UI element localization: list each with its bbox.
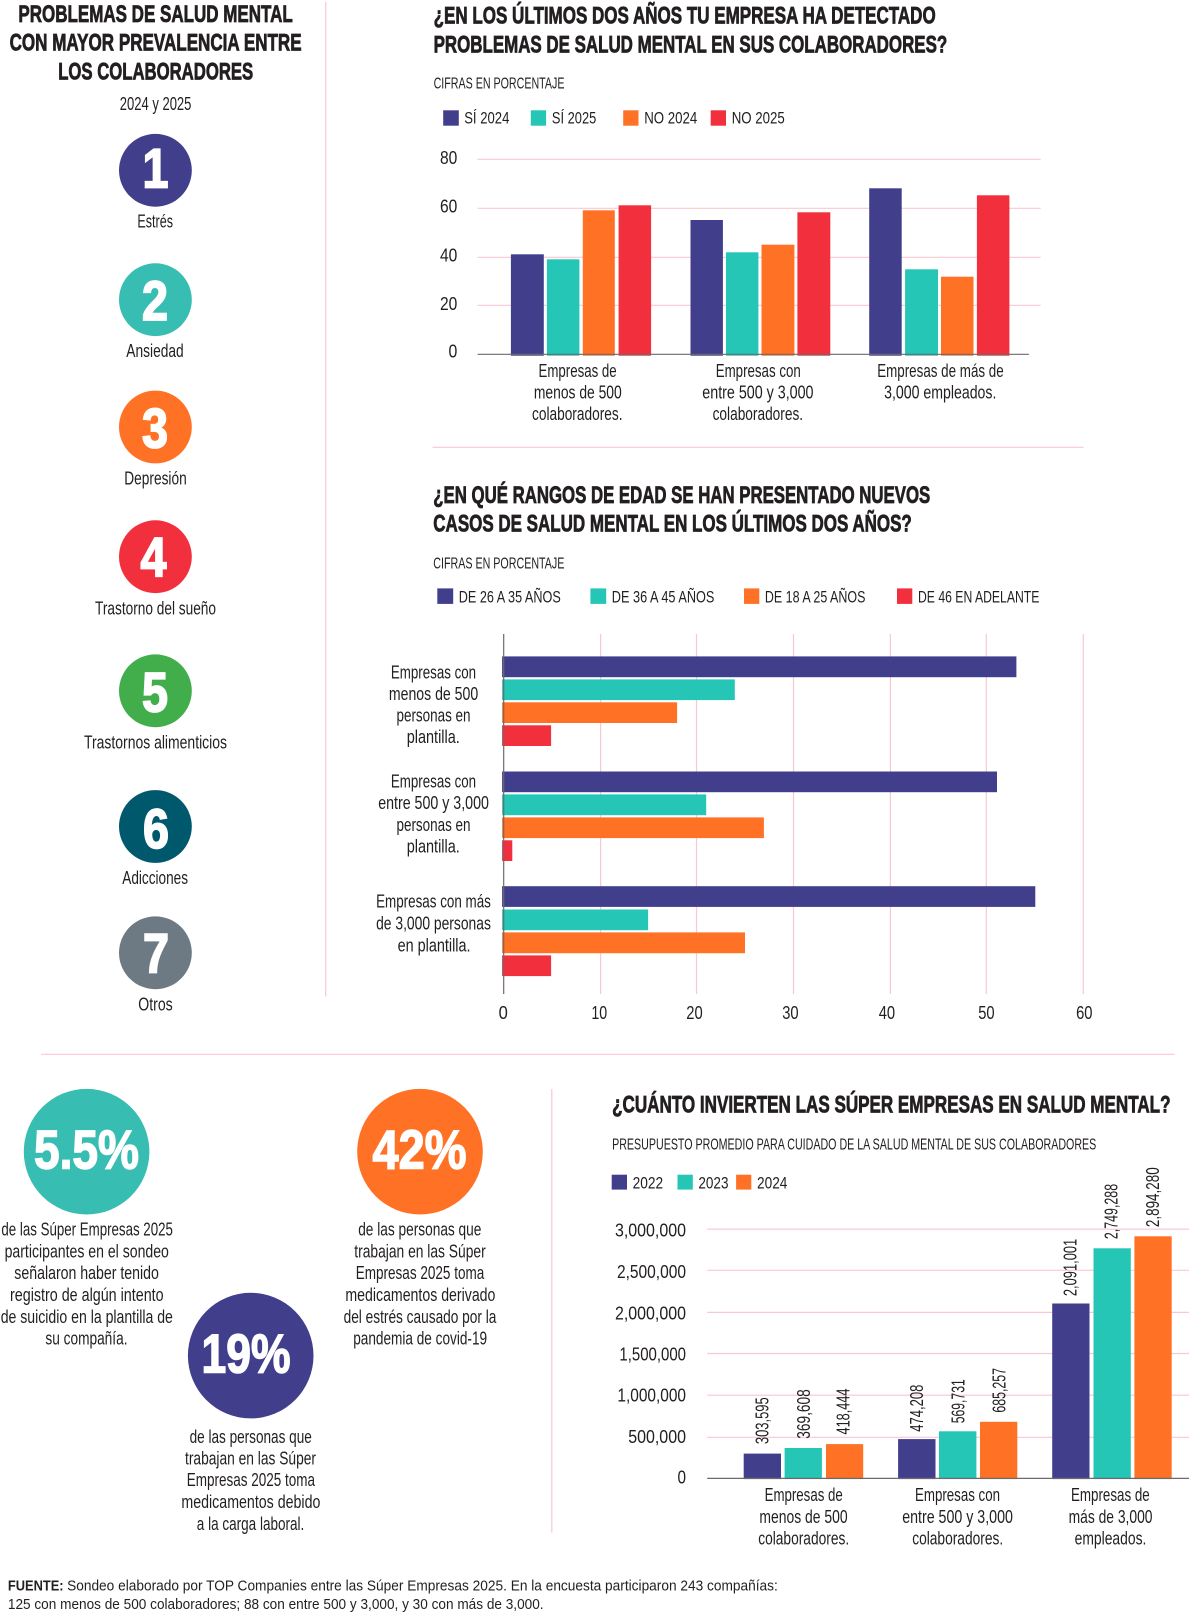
ranking item 1: estrés: 1: [142, 137, 168, 200]
heading: problemas detectados: [434, 1, 947, 59]
bars: entre 500 y 3,000: [690, 212, 830, 356]
category label: más de 3,000: 3,000 empleados.: [884, 382, 996, 402]
category label: menos de 500: Empresas de: [538, 361, 617, 381]
value labels: 569,731: [947, 1379, 968, 1423]
row label: menos de 500: Empresas con: [391, 663, 476, 683]
y axis labels: 1,500,000: [619, 1344, 686, 1365]
source note: 125 con menos de 500 colaboradores; 88 con entre 500 y 3,000, y 30 con más de 3,000.: [8, 1597, 544, 1613]
stat text: 42%: medicamentos derivado: [345, 1285, 495, 1305]
row label: entre 500 y 3,000: personas en: [396, 815, 470, 835]
heading: rangos de edad: CASOS DE SALUD MENTAL EN LOS ÚLTIMOS DOS AÑOS?: [433, 509, 912, 537]
stat text: 5.5%: registro de algún intento: [10, 1285, 164, 1305]
stat text: 42%: pandemia de covid-19: [353, 1329, 487, 1349]
bars: entre 500 y 3,000: [502, 772, 997, 861]
y axis labels: 20: [440, 294, 457, 314]
row label: entre 500 y 3,000: Empresas con: [391, 771, 476, 791]
value labels: [752, 1167, 1163, 1444]
legend: rangos de edad: DE 18 A 25 AÑOS: [765, 587, 865, 607]
bars: más de 3,000: [502, 886, 1035, 976]
stat text: 19%: [181, 1427, 320, 1534]
stat: 42% medicamentos por estrés: [344, 1089, 497, 1349]
y axis labels: 2,500,000: [617, 1261, 686, 1282]
subtitle: years: 2024 y 2025: [120, 94, 191, 114]
bars: menos de 500: [744, 1444, 863, 1479]
x axis labels: [499, 1003, 1093, 1023]
ranking item 4: trastorno del sueño: 4: [140, 526, 166, 589]
ranking item 2: ansiedad: [119, 263, 192, 361]
legend: rangos de edad: DE 26 A 35 AÑOS: [459, 587, 561, 607]
y axis labels: [615, 1219, 686, 1488]
value labels: 2,749,288: [1101, 1184, 1122, 1239]
value labels: 2,894,280: [1142, 1167, 1163, 1227]
ranking item 7: otros: 7: [143, 922, 169, 985]
category label: más de 3,000: [877, 361, 1004, 402]
category label: menos de 500: colaboradores.: [532, 404, 622, 424]
row label: más de 3,000: [376, 891, 491, 955]
row label: más de 3,000: Empresas con más: [376, 891, 491, 911]
value labels: 303,595: [752, 1397, 772, 1444]
category label: más de 3,000: Empresas de más de: [877, 361, 1004, 381]
ranking item 5: trastornos alimenticios: [84, 654, 227, 752]
stat text: 5.5%: de suicidio en la plantilla de: [1, 1307, 173, 1327]
bar chart: problemas detectados: [440, 148, 1041, 424]
horizontal bar chart: rangos de edad: [376, 634, 1093, 1023]
row label: menos de 500: personas en: [396, 706, 470, 726]
heading: problemas de salud mental: [10, 1, 302, 85]
row label: entre 500 y 3,000: entre 500 y 3,000: [378, 793, 489, 813]
category label: menos de 500: menos de 500: [534, 382, 622, 402]
category label: entre 500 y 3,000: [902, 1485, 1013, 1549]
legend: rangos de edad: DE 46 EN ADELANTE: [918, 589, 1039, 607]
legend: años: 2022: [633, 1175, 663, 1193]
legend: sí y no por año: SÍ 2025: [552, 109, 596, 128]
category label: entre 500 y 3,000: entre 500 y 3,000: [902, 1507, 1013, 1527]
heading: problemas de salud mental: LOS COLABORADORES: [58, 58, 253, 85]
y axis labels: 60: [440, 197, 457, 217]
y axis labels: 3,000,000: [615, 1219, 686, 1240]
category label: entre 500 y 3,000: Empresas con: [716, 361, 801, 381]
stat text: 5.5%: participantes en el sondeo: [5, 1241, 169, 1261]
stat: 19% medicamentos por carga laboral: 19%: [202, 1322, 290, 1384]
ranking item 7: otros: [119, 916, 192, 1014]
stat text: 42%: de las personas que: [358, 1219, 481, 1239]
panel: problemas detectados por tamaño de empresa: [434, 1, 1041, 424]
stat: 5.5% intento de suicidio: 5.5%: [34, 1118, 139, 1180]
heading: rangos de edad: ¿EN QUÉ RANGOS DE EDAD SE HAN PRESENTADO NUEVOS: [433, 481, 930, 509]
ranking item 7: otros: Otros: [138, 994, 173, 1014]
stat text: 42%: del estrés causado por la: [344, 1307, 497, 1327]
stat text: 19%: Empresas 2025 toma: [187, 1470, 316, 1490]
stat text: 5.5%: [1, 1219, 173, 1349]
source note: FUENTE:: [8, 1578, 64, 1594]
value labels: 474,208: [906, 1385, 927, 1432]
stat text: 42%: trabajan en las Súper: [354, 1241, 486, 1261]
y axis labels: 1,000,000: [617, 1385, 686, 1406]
category label: entre 500 y 3,000: colaboradores.: [912, 1529, 1003, 1549]
x axis labels: 30: [782, 1003, 799, 1023]
heading: problemas de salud mental: CON MAYOR PREVALENCIA ENTRE: [10, 29, 302, 56]
bars: menos de 500: [511, 205, 651, 356]
category label: más de 3,000: más de 3,000: [1069, 1507, 1152, 1527]
x axis labels: 40: [879, 1003, 895, 1023]
row label: menos de 500: [389, 663, 478, 747]
source note: [8, 1578, 778, 1613]
legend: sí y no por año: [443, 109, 785, 128]
bars: más de 3,000: [1052, 1236, 1172, 1479]
legend: años: [612, 1175, 787, 1193]
heading: problemas detectados: ¿EN LOS ÚLTIMOS DOS AÑOS TU EMPRESA HA DETECTADO: [434, 1, 936, 29]
ranking item 2: ansiedad: Ansiedad: [126, 341, 184, 361]
category label: más de 3,000: Empresas de: [1071, 1485, 1150, 1505]
y axis labels: 0: [678, 1466, 686, 1487]
stat text: 19%: a la carga laboral.: [197, 1514, 304, 1534]
x axis labels: 0: [499, 1003, 508, 1023]
value labels: 2,091,001: [1060, 1239, 1081, 1296]
y axis labels: 0: [448, 342, 457, 362]
ranking item 6: adicciones: Adicciones: [122, 868, 188, 888]
subtitle: cifras en porcentaje: CIFRAS EN PORCENTAJE: [434, 76, 564, 93]
y axis labels: [440, 148, 457, 362]
ranking item 2: ansiedad: 2: [142, 269, 168, 332]
ranking item 5: trastornos alimenticios: 5: [142, 660, 168, 723]
ranking item 4: trastorno del sueño: [95, 520, 216, 618]
ranking item 3: depresión: 3: [142, 396, 168, 459]
category label: más de 3,000: [1069, 1485, 1152, 1549]
panel: rangos de edad: [376, 481, 1093, 1023]
category label: menos de 500: Empresas de: [765, 1485, 843, 1505]
category label: entre 500 y 3,000: colaboradores.: [713, 404, 803, 424]
row label: menos de 500: plantilla.: [407, 727, 460, 747]
stat: 42% medicamentos por estrés: 42%: [372, 1118, 466, 1180]
ranking item 3: depresión: Depresión: [124, 469, 187, 489]
ranking item 6: adicciones: [119, 790, 192, 888]
bar chart: presupuesto: [615, 1167, 1189, 1549]
category label: más de 3,000: empleados.: [1075, 1529, 1146, 1549]
stat text: 5.5%: señalaron haber tenido: [14, 1263, 159, 1283]
bars: entre 500 y 3,000: [898, 1422, 1017, 1479]
category label: entre 500 y 3,000: Empresas con: [915, 1485, 1000, 1505]
stat text: 19%: medicamentos debido: [181, 1492, 320, 1512]
legend: rangos de edad: DE 36 A 45 AÑOS: [612, 587, 714, 607]
ranking item 3: depresión: [119, 391, 192, 489]
value labels: 418,444: [833, 1388, 854, 1434]
heading: problemas detectados: PROBLEMAS DE SALUD MENTAL EN SUS COLABORADORES?: [434, 32, 947, 59]
row label: más de 3,000: en plantilla.: [398, 935, 470, 955]
category label: menos de 500: menos de 500: [759, 1507, 848, 1527]
bars: más de 3,000: [869, 188, 1009, 356]
legend: sí y no por año: NO 2024: [644, 110, 697, 128]
y axis labels: 40: [440, 245, 457, 265]
ranking item 4: trastorno del sueño: Trastorno del sueño: [95, 598, 216, 618]
row label: menos de 500: menos de 500: [389, 684, 478, 704]
value labels: 685,257: [988, 1368, 1009, 1413]
legend: sí y no por año: SÍ 2024: [464, 109, 509, 128]
stat text: 42%: [344, 1219, 497, 1349]
stat text: 5.5%: su compañía.: [45, 1329, 128, 1349]
x axis labels: 20: [686, 1003, 703, 1023]
category label: menos de 500: colaboradores.: [758, 1529, 849, 1549]
stat text: 19%: de las personas que: [190, 1427, 312, 1447]
row label: entre 500 y 3,000: plantilla.: [407, 836, 460, 856]
x axis labels: 60: [1076, 1003, 1092, 1023]
source note: Sondeo elaborado por TOP Companies entre las Súper Empresas 2025. En la encuesta participaron 243 compañías:: [67, 1578, 778, 1594]
ranking item 5: trastornos alimenticios: Trastornos alimenticios: [84, 732, 227, 752]
stat text: 5.5%: de las Súper Empresas 2025: [1, 1219, 173, 1239]
row label: más de 3,000: de 3,000 personas: [376, 914, 491, 934]
legend: rangos de edad: [437, 587, 1039, 607]
ranking item 1: estrés: [119, 134, 192, 232]
ranking item 1: estrés: Estrés: [137, 212, 173, 232]
ranking item 6: adicciones: 6: [143, 797, 169, 860]
panel: problemas de salud mental: [10, 1, 302, 1014]
category label: entre 500 y 3,000: entre 500 y 3,000: [702, 382, 814, 402]
x axis labels: 10: [591, 1003, 607, 1023]
value labels: 369,608: [793, 1389, 814, 1439]
heading: problemas de salud mental: PROBLEMAS DE SALUD MENTAL: [18, 1, 293, 28]
category label: menos de 500: [758, 1485, 849, 1549]
legend: años: 2023: [698, 1175, 728, 1193]
x axis labels: 50: [978, 1003, 995, 1023]
bars: menos de 500: [502, 656, 1016, 746]
heading: rangos de edad: [433, 481, 930, 538]
stat: 19% medicamentos por carga laboral: [181, 1293, 320, 1534]
legend: sí y no por año: NO 2025: [732, 110, 785, 128]
row label: entre 500 y 3,000: [378, 772, 489, 856]
subtitle: cifras en porcentaje: CIFRAS EN PORCENTAJE: [433, 555, 564, 572]
stat text: 19%: trabajan en las Súper: [185, 1449, 316, 1469]
category label: entre 500 y 3,000: [702, 361, 814, 424]
stat: 5.5% intento de suicidio: [1, 1089, 173, 1349]
legend: años: 2024: [757, 1175, 787, 1193]
y axis labels: 2,000,000: [615, 1303, 686, 1324]
panel: inversión en salud mental: [612, 1090, 1189, 1549]
y axis labels: 500,000: [628, 1426, 686, 1447]
y axis labels: 80: [440, 148, 457, 168]
stat text: 42%: Empresas 2025 toma: [356, 1263, 485, 1283]
category label: menos de 500: [532, 361, 622, 424]
